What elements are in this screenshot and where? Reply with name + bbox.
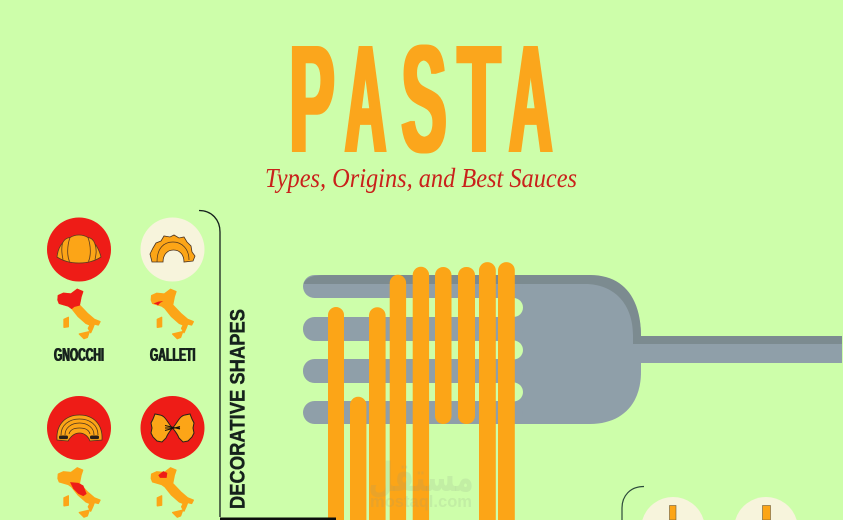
subtitle: Types, Origins, and Best Sauces [265, 163, 577, 193]
icon: lower right pasta 1 [642, 497, 704, 520]
title: P [289, 13, 335, 186]
title [289, 12, 552, 186]
item: galleti [140, 218, 204, 365]
label: galleti: GALLETI [150, 344, 196, 365]
title: A [509, 12, 552, 185]
item: gnocchi [47, 218, 111, 365]
watermark: mostaql.com [370, 492, 472, 511]
map: gnocchi origin [58, 289, 100, 339]
icon: farfalle [140, 396, 204, 460]
fork [303, 275, 842, 424]
watermark: مستقل [368, 455, 474, 501]
title: A [345, 13, 386, 185]
icon: macaroni [47, 396, 111, 460]
bracket: lower right section [622, 486, 644, 520]
icon: lower right pasta 2 [735, 497, 797, 520]
icon: gnocchi [47, 218, 111, 282]
label: gnocchi: GNOCCHI [54, 344, 104, 365]
title: S [401, 13, 447, 186]
item: farfalle [140, 396, 204, 517]
map: macaroni origin [58, 468, 100, 517]
spaghetti strands [328, 262, 515, 520]
map: galleti origin [151, 289, 193, 339]
divider bar [220, 518, 336, 520]
icon: galleti [140, 218, 204, 282]
item: macaroni [47, 396, 111, 517]
section label: decorative shapes: DECORATIVE SHAPES [226, 309, 250, 509]
map: farfalle origin [151, 468, 193, 517]
bracket: decorative shapes [199, 210, 220, 517]
title: T [458, 14, 500, 185]
